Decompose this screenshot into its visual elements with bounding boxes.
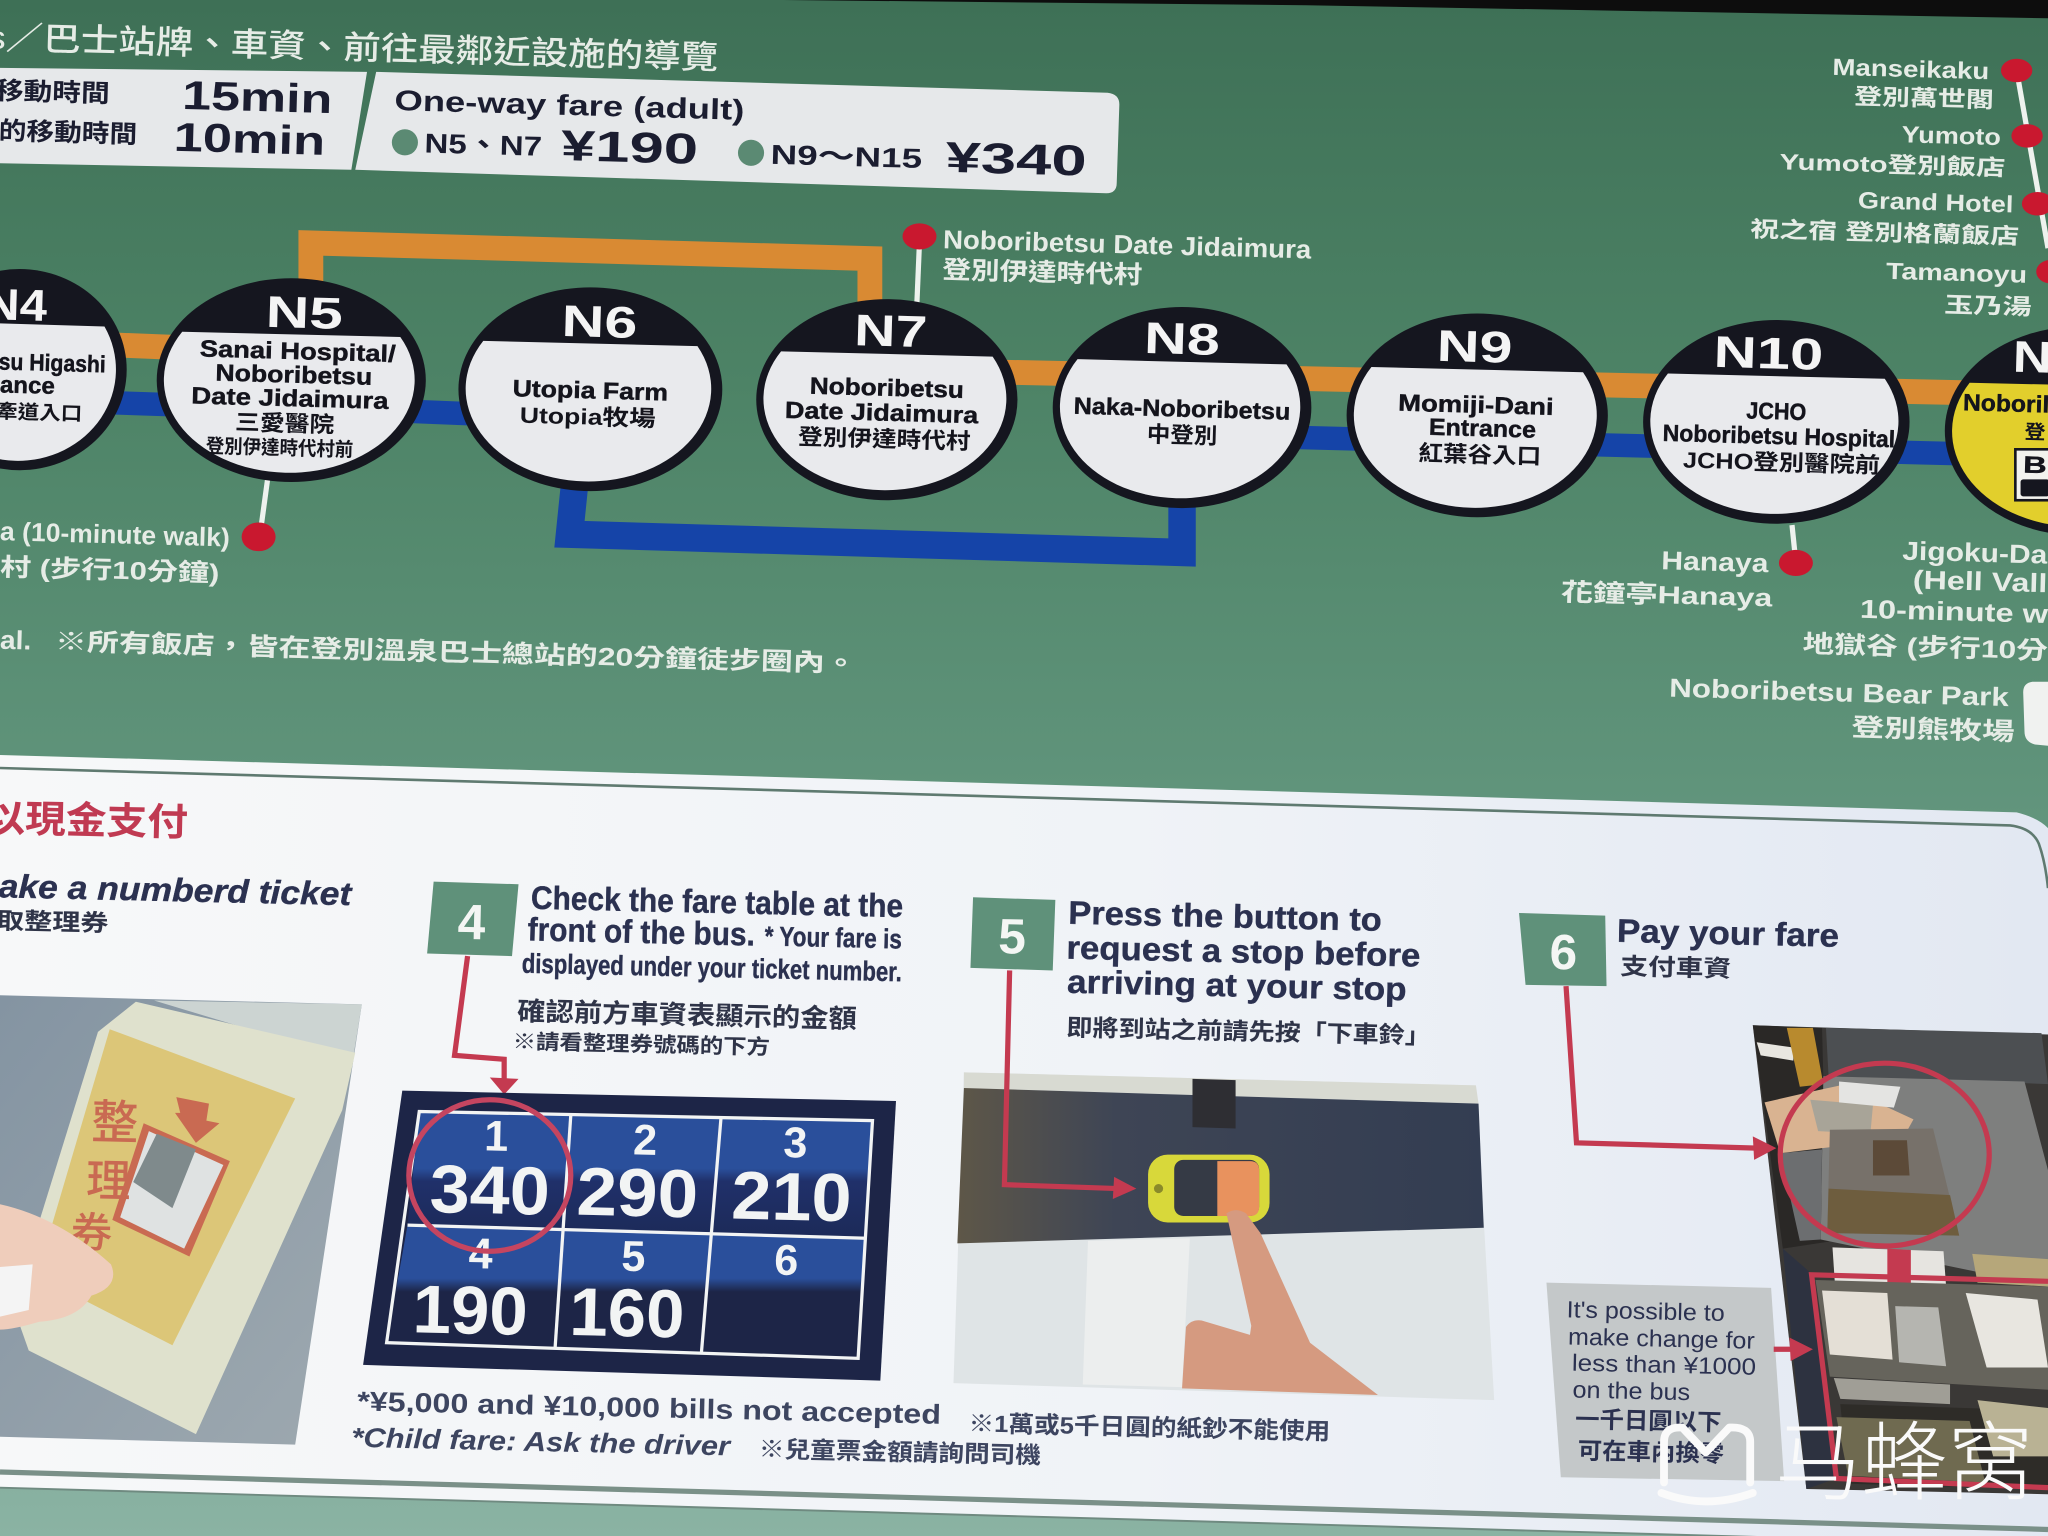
- route lines: orange and blue: [98, 243, 2048, 552]
- labels: hotels list: 登別萬世閣: [1854, 84, 1994, 113]
- labels: hotels list: Tamanoyu: [1886, 258, 2027, 288]
- callout: change note: It's possible to: [1566, 1296, 1725, 1326]
- fare table: 290: [576, 1155, 699, 1232]
- note: hotels within walking distance: al.: [0, 625, 32, 656]
- arrow: change note to machine: [1774, 1337, 1813, 1361]
- label: Jigoku-Dani: 10-minute w: [1860, 594, 2048, 629]
- station: N5: 登別伊達時代村前: [205, 435, 354, 462]
- labels: hotels list: 祝之宿 登別格蘭飯店: [1750, 216, 2020, 249]
- arrow: step 4 to fare table: [455, 956, 519, 1095]
- label: Jigoku-Dani: [1802, 536, 2048, 665]
- station: N7: 登別伊達時代村: [798, 424, 971, 454]
- watermark logo: [1661, 1393, 2034, 1518]
- step badge: 6: 6: [1549, 924, 1578, 980]
- label: Noboribetsu Date Jidaimura: Noboribetsu Date Jidaimura: [943, 224, 1312, 265]
- station: N7: Noboribetsu: [809, 373, 964, 403]
- label: Noboribetsu Date Jidaimura: 登別伊達時代村: [942, 256, 1143, 290]
- photo: ticket machine: [0, 995, 362, 1445]
- note: hotels within walking distance: [0, 625, 857, 678]
- text: press the button: [1066, 894, 1431, 1049]
- arrow: step 5 to button: [1004, 970, 1136, 1199]
- station: N4: su Higashi: [0, 348, 106, 377]
- callout: change note: [1546, 1283, 1784, 1481]
- station: N10: [1643, 320, 1910, 524]
- station: N6: [458, 287, 722, 491]
- note: hotels within walking distance: ※所有飯店，皆在登別溫泉巴士總站的20分鐘徒步圈內。: [55, 628, 857, 678]
- step badge: 5: 5: [998, 908, 1027, 965]
- station: N10: Noboribetsu Hospital: [1662, 420, 1896, 452]
- station: N9: 紅葉谷入口: [1418, 441, 1542, 469]
- connector: stop markers: [260, 71, 2048, 563]
- notes: bills and child fare: ※1萬或5千日圓的紙鈔不能使用: [968, 1410, 1331, 1445]
- fare table: 4: [468, 1230, 493, 1279]
- text: check the fare table: displayed under your ticket number.: [521, 948, 902, 987]
- station: N8: N8: [1143, 314, 1221, 365]
- fare table: 3: [783, 1119, 808, 1167]
- step badge: 4: 4: [457, 894, 486, 950]
- station: N5: Date Jidaimura: [191, 382, 390, 414]
- notes: bills and child fare: *¥5,000 and ¥10,000 bills not accepted: [357, 1386, 941, 1430]
- text: pay your fare: [1617, 912, 1839, 982]
- labels: hotels list: 玉乃湯: [1944, 292, 2032, 320]
- top dark edge: [784, 0, 2048, 18]
- label: Hanaya: [1560, 545, 1773, 612]
- text: check the fare table: [512, 879, 904, 1059]
- text: check the fare table: * Your fare is: [764, 920, 902, 954]
- station: N5: Noboribetsu: [215, 360, 373, 390]
- fare table: 210: [731, 1159, 852, 1236]
- icon: logo mark: [1661, 1427, 1753, 1501]
- callout: change note: 一千日圓以下: [1575, 1406, 1722, 1436]
- notes: bills and child fare: [351, 1386, 1331, 1468]
- label: Bear Park: 登別熊牧場: [1851, 714, 2015, 746]
- watermark logo: 马蜂窝: [1775, 1393, 2034, 1518]
- notes: bills and child fare: *Child fare: Ask the driver: [351, 1422, 732, 1461]
- text: step 3 take a numbered ticket: [0, 867, 353, 936]
- station: N7: [756, 299, 1017, 500]
- panel: travel times: 15min: [182, 72, 333, 122]
- photo: stop button: [953, 1072, 1494, 1400]
- station: N5: [157, 278, 426, 482]
- label: 10-minute walk left: [0, 516, 230, 588]
- station: N10: N10: [1713, 328, 1824, 380]
- station: N6: Utopia Farm: [512, 375, 668, 406]
- panel: one-way fare: ¥340: [945, 134, 1087, 186]
- labels: hotels list: [1750, 54, 2032, 320]
- label: Jigoku-Dani: 地獄谷 (步行10分: [1802, 630, 2048, 665]
- callout: change note: 可在車內換零: [1578, 1438, 1724, 1467]
- fare table: 160: [569, 1275, 685, 1352]
- station: N5: 三愛醫院: [235, 409, 335, 437]
- fare table: 190: [412, 1272, 529, 1350]
- arrow: step 6 to fare box: [1566, 986, 1776, 1160]
- panel: travel times: [0, 68, 367, 170]
- label: Jigoku-Dani: (Hell Vall: [1912, 564, 2048, 598]
- station: N8: [1053, 307, 1311, 508]
- text: check the fare table: 確認前方車資表顯示的金額: [517, 996, 857, 1034]
- station: N6: N6: [561, 297, 638, 348]
- text: step 3 take a numbered ticket: ake a numberd ticket: [0, 867, 353, 912]
- station: N9: N9: [1436, 322, 1513, 373]
- label: Hanaya: Hanaya: [1661, 545, 1769, 578]
- station: N5: Sanai Hospital/: [200, 335, 397, 367]
- panel: one-way fare: [355, 72, 1119, 193]
- station: N11 terminal: B: [2023, 451, 2047, 478]
- photo: ticket machine: 理: [86, 1157, 131, 1207]
- station: N11 terminal: Noboril: [1963, 389, 2048, 418]
- label: Jigoku-Dani: Jigoku-Da: [1902, 536, 2048, 570]
- station: N9: Entrance: [1429, 414, 1536, 443]
- label: Noboribetsu Date Jidaimura: [942, 224, 1312, 290]
- station: N8: Naka-Noboribetsu: [1073, 393, 1291, 425]
- callout: change note: on the bus: [1572, 1377, 1690, 1405]
- fare table: 1: [484, 1112, 509, 1161]
- station: N10: JCHO登別醫院前: [1683, 446, 1880, 478]
- callout: change note: make change for: [1568, 1323, 1755, 1354]
- fare table: 2: [633, 1116, 658, 1165]
- panel: one-way fare: N5、N7: [424, 127, 542, 162]
- labels: hotels list: Yumoto登別飯店: [1779, 149, 2006, 181]
- step badge: 5: [970, 897, 1055, 970]
- station: N7: Date Jidaimura: [785, 397, 980, 428]
- fare table: 6: [774, 1237, 799, 1285]
- text: check the fare table: ※請看整理券號碼的下方: [512, 1030, 770, 1059]
- icon: ropeway sign: [2023, 682, 2048, 746]
- panel: how to pay: [0, 755, 2048, 1536]
- labels: hotels list: Manseikaku: [1832, 54, 1990, 84]
- station: N7: N7: [854, 306, 928, 357]
- station: N9: [1347, 313, 1608, 517]
- panel: travel times: 10min: [173, 114, 326, 164]
- icon: red stop dots: [242, 59, 2048, 576]
- station: N8: 中登別: [1146, 422, 1218, 449]
- station: N11 terminal: [1945, 327, 2048, 536]
- panel: one-way fare: One-way fare (adult): [394, 85, 745, 127]
- text: pay your fare: Pay your fare: [1617, 912, 1839, 954]
- station: N11 terminal: N: [2012, 333, 2048, 383]
- station: N6: Utopia牧場: [520, 403, 656, 431]
- fare table: 5: [621, 1233, 646, 1281]
- step badge: 6: [1519, 913, 1607, 986]
- photo: fare box: [1753, 1025, 2048, 1494]
- highlight shapes: [1780, 1063, 2048, 1488]
- panel: travel times: 的移動時間: [0, 117, 138, 149]
- text: press the button: request a stop before: [1066, 929, 1421, 974]
- station: N9: Momiji-Dani: [1398, 390, 1554, 420]
- text: press the button: Press the button to: [1068, 894, 1382, 938]
- station: N4: [0, 269, 127, 470]
- text: pay your fare: 支付車資: [1620, 953, 1732, 982]
- panel: one-way fare: ¥190: [560, 122, 699, 174]
- step badge: 4: [427, 882, 519, 956]
- highlight circle: [409, 1100, 571, 1251]
- text: press the button: arriving at your stop: [1067, 963, 1407, 1007]
- label: 10-minute walk left: 村 (步行10分鐘): [0, 554, 220, 588]
- text: check the fare table: front of the bus.: [527, 910, 755, 953]
- label: Bear Park: Noboribetsu Bear Park: [1669, 673, 2010, 712]
- photo: ticket machine: 整: [91, 1095, 139, 1149]
- label: Bear Park: [1669, 673, 2015, 746]
- labels: hotels list: Yumoto: [1901, 121, 2001, 150]
- text: press the button: 即將到站之前請先按「下車鈴」: [1066, 1014, 1431, 1049]
- notes: bills and child fare: ※兒童票金額請詢問司機: [759, 1435, 1041, 1468]
- text: check the fare table: Check the fare table at the: [531, 879, 904, 924]
- label: 10-minute walk left: a (10-minute walk): [0, 516, 230, 553]
- label: Hanaya: 花鐘亭Hanaya: [1560, 577, 1773, 612]
- fare table: [363, 1091, 896, 1381]
- heading: guide subtitle: s／巴士站牌、車資、前往最鄰近設施的導覽: [0, 19, 719, 76]
- panel: one-way fare: N9～N15: [770, 139, 923, 174]
- labels: hotels list: Grand Hotel: [1858, 187, 2014, 217]
- fare table: 340: [429, 1152, 551, 1230]
- station: N5: N5: [265, 288, 344, 339]
- photo: ticket machine: 券: [70, 1209, 113, 1257]
- station: N11 terminal: 登: [2024, 422, 2046, 444]
- station: N4: ance: [0, 371, 55, 399]
- station: N10: JCHO: [1746, 397, 1807, 425]
- callout: change note: less than ¥1000: [1572, 1350, 1756, 1380]
